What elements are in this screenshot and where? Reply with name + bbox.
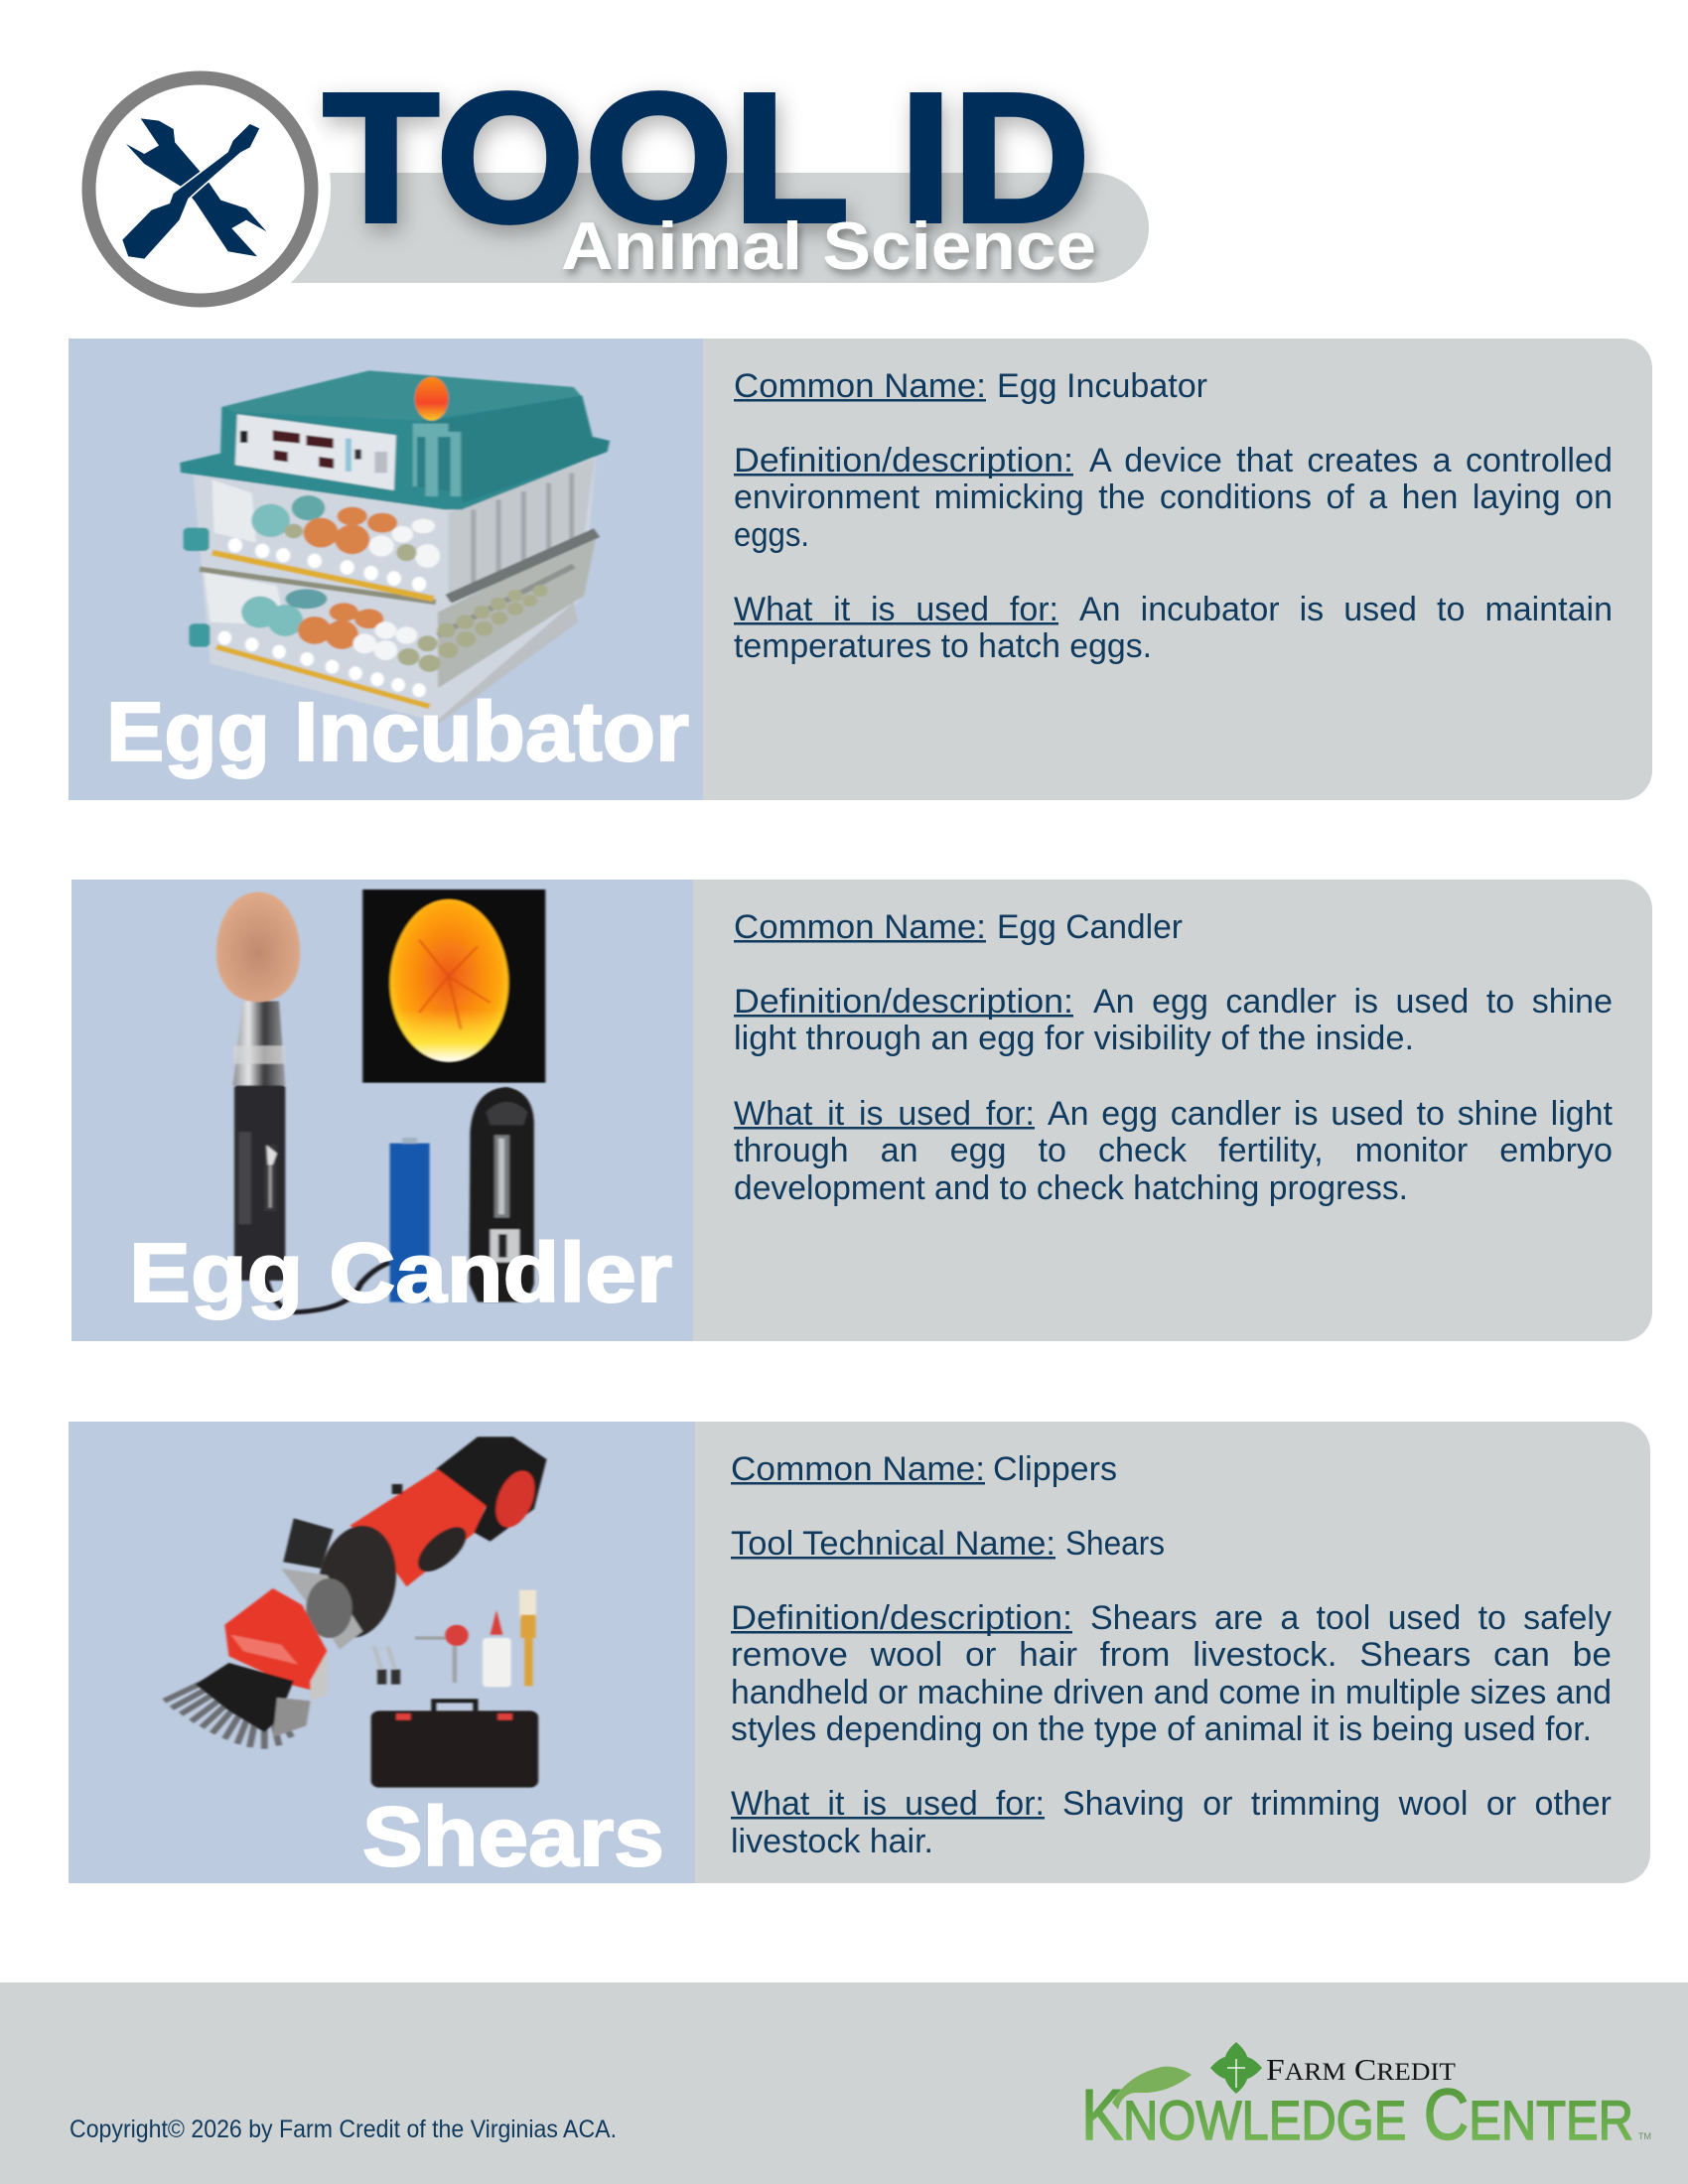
text: shears details (731, 1450, 1612, 1860)
banner pill (248, 173, 1149, 283)
image: egg incubator (180, 370, 610, 723)
subtitle: Animal Science (561, 208, 1096, 284)
text: egg incubator details: environment mimicking the conditions of a hen laying on (734, 478, 1613, 516)
image: egg candler kit (216, 889, 545, 1312)
text: shears details: Shears (1065, 1525, 1165, 1563)
icon: wrench and screwdriver badge (69, 58, 331, 320)
image: shears and accessories (164, 1436, 546, 1788)
text: egg incubator details: A device that creates a controlled (1089, 442, 1613, 479)
tool name label: Shears (362, 1790, 664, 1883)
header banner (69, 56, 1149, 320)
text: shears details: What it is used for: (731, 1785, 1045, 1823)
icon: leaf (1112, 2067, 1192, 2110)
text: egg incubator details: What it is used for: (734, 591, 1058, 628)
text: shears details: handheld or machine driven and come in multiple sizes and (731, 1674, 1612, 1711)
text: egg candler details (734, 908, 1614, 1207)
text: shears details: Definition/description: (731, 1599, 1072, 1637)
text: shears details: styles depending on the type of animal it is being used for. (731, 1710, 1592, 1748)
text: shears details: livestock hair. (731, 1823, 933, 1860)
info card background (596, 339, 1652, 800)
text: shears details: Tool Technical Name: (731, 1525, 1055, 1563)
text: shears details: Shears are a tool used to safely (1090, 1599, 1612, 1637)
text: shears details: Common Name: (731, 1450, 985, 1488)
text: egg candler details: An egg candler is used to shine (1093, 983, 1613, 1021)
text: egg incubator details: Egg Incubator (997, 367, 1207, 405)
trademark: TM (1638, 2131, 1651, 2141)
Farm Credit wordmark: FARM CREDIT (1266, 2052, 1456, 2087)
text: egg candler details: through an egg to check fertility, monitor embryo (734, 1132, 1613, 1169)
text: egg candler details: Common Name: (734, 908, 986, 946)
title: TOOL ID (323, 56, 1090, 261)
panel: egg incubator (69, 339, 1652, 800)
tool name label: Egg Candler (129, 1226, 672, 1319)
text: egg candler details: Egg Candler (997, 908, 1183, 946)
copyright: Copyright© 2026 by Farm Credit of the Virginias ACA. (70, 2116, 617, 2143)
image tile (69, 1422, 695, 1883)
text: egg incubator details: An incubator is used to maintain (1079, 591, 1613, 628)
text: shears details: Shaving or trimming wool or other (1062, 1785, 1612, 1823)
logo: Farm Credit Knowledge Center (1081, 2042, 1651, 2155)
text: egg incubator details (734, 367, 1613, 665)
text: egg candler details: An egg candler is used to shine light (1048, 1095, 1614, 1133)
text: egg incubator details: Common Name: (734, 367, 986, 405)
text: egg incubator details: temperatures to hatch eggs. (734, 627, 1152, 665)
text: egg candler details: development and to check hatching progress. (734, 1169, 1408, 1207)
tool name label: Egg Incubator (106, 685, 689, 778)
footer band (0, 1982, 1688, 2184)
text: egg incubator details: Definition/description: (734, 442, 1073, 479)
panel: egg candler (71, 880, 1652, 1341)
text: egg candler details: What it is used for: (734, 1095, 1035, 1133)
text: shears details: remove wool or hair from livestock. Shears can be (731, 1636, 1612, 1674)
icon: diamond leaf emblem (1210, 2042, 1262, 2094)
info card background (596, 1422, 1650, 1883)
image tile (69, 339, 703, 800)
text: egg candler details: light through an egg for visibility of the inside. (734, 1020, 1414, 1057)
info card background (596, 880, 1652, 1341)
text: egg incubator details: eggs. (734, 516, 809, 554)
Knowledge Center wordmark: KNOWLEDGE CENTER (1081, 2076, 1633, 2155)
footer (0, 1982, 1688, 2184)
image tile (71, 880, 693, 1341)
panel: shears (69, 1422, 1650, 1883)
text: egg candler details: Definition/description: (734, 983, 1073, 1021)
text: shears details: Clippers (993, 1450, 1117, 1488)
